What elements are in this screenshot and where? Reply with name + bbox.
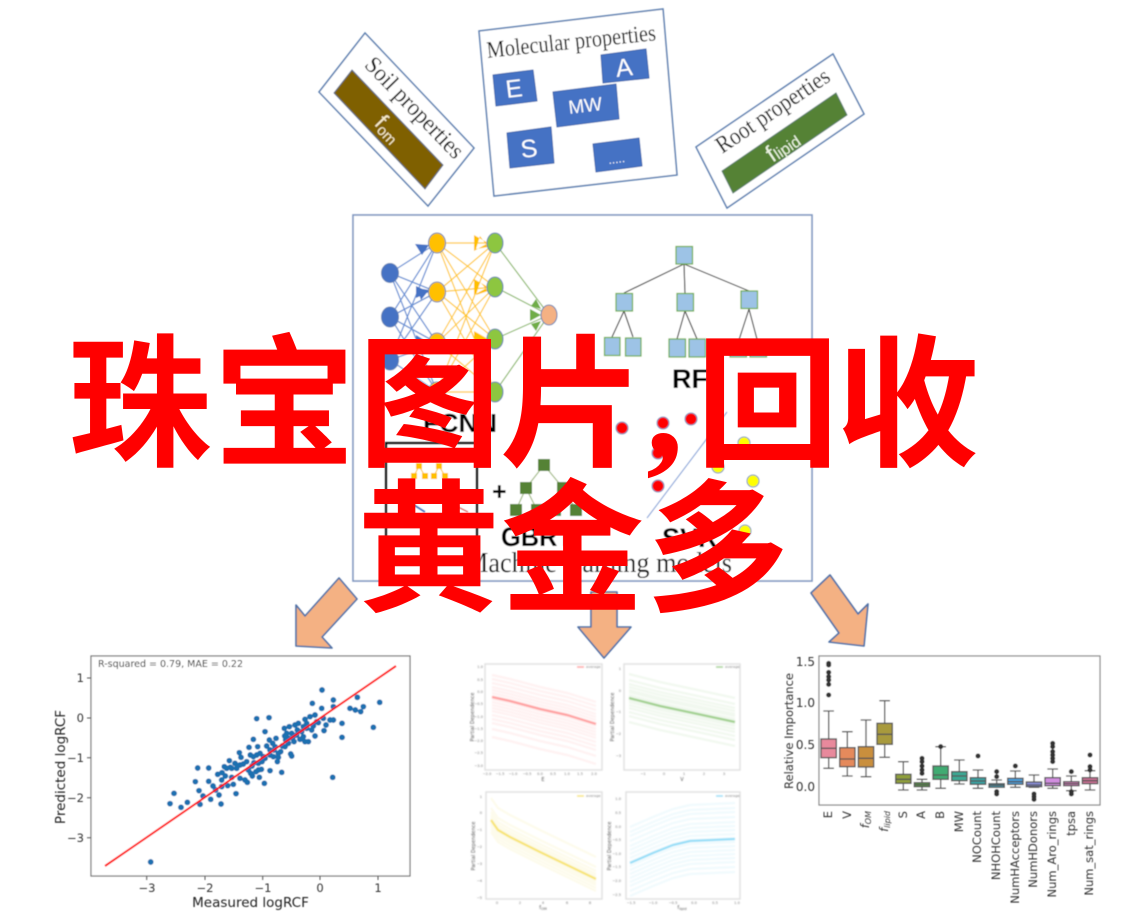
x category labels: f: [858, 824, 872, 828]
y tick labels: 0.5: [796, 738, 815, 752]
feature more: [593, 138, 642, 172]
soil fom label: f: [370, 110, 393, 132]
partial dependence: E: −3.0: [474, 764, 484, 768]
y tick labels: 0.0: [796, 780, 815, 794]
x axis title: Measured logRCF: [192, 895, 309, 911]
partial dependence: flipid: 0.5: [615, 811, 621, 815]
x category labels: NOCount: [970, 811, 984, 863]
partial dependence: E: 0.5: [550, 772, 556, 776]
root flipid label: f: [761, 142, 781, 168]
partial dependence: flipid: −1.5: [612, 865, 621, 869]
gradient boosted tree: [510, 459, 582, 516]
partial dependence: E: 2.0: [591, 772, 598, 776]
arrow: middle: [578, 592, 631, 658]
partial dependence: E: −0.5: [523, 772, 531, 776]
scatter tick labels: −1: [255, 881, 271, 895]
title overlay line 2: 黄金多: [357, 435, 789, 642]
partial dependence: E: average: [586, 665, 602, 669]
partial dependence: E: −1.0: [509, 772, 518, 776]
x category labels: Num_sat_rings: [1082, 811, 1096, 896]
partial dependence: V: V: [680, 777, 684, 783]
partial dependence: fom: 2: [519, 901, 521, 905]
partial dependence: V: Partial Dependence: [610, 693, 616, 741]
partial dependence: flipid: 0.0: [691, 901, 698, 905]
partial dependence: V: 3: [723, 772, 725, 776]
partial dependence: E: 1.5: [577, 772, 583, 776]
x category labels: tpsa: [1064, 811, 1078, 836]
partial dependence: E: −0.5: [474, 702, 483, 706]
x category labels: V: [840, 811, 854, 819]
partial dependence: fom: 1: [480, 795, 482, 799]
partial dependence: E: −2.0: [474, 739, 484, 743]
partial dependence: flipid: 1.0: [734, 901, 741, 905]
feature A: [601, 49, 649, 83]
partial dependence: V: −3: [616, 754, 621, 758]
panel: root properties: [696, 54, 864, 208]
x category labels: B: [933, 811, 947, 819]
feature A: A: [614, 53, 634, 83]
partial dependence: fom: Partial Dependence: [471, 822, 477, 870]
partial dependence: fom: 0: [480, 811, 483, 815]
partial dependence: fom: 8: [589, 901, 592, 905]
boxes, whiskers and outliers: [821, 663, 1098, 799]
x category labels: S: [896, 811, 910, 818]
partial dependence: fom: −2: [477, 845, 482, 849]
scatter chart: predicted vs measured logRCF: [53, 656, 410, 911]
panel: soil properties: [319, 33, 474, 206]
x category labels: NHOHCount: [989, 811, 1003, 880]
plus sign: +: [492, 478, 507, 506]
partial dependence: flipid: −2.5: [612, 893, 621, 897]
title overlay comma: ,: [646, 322, 684, 488]
partial dependence: flipid: 1.0: [615, 797, 622, 801]
partial dependence: fom: −4: [477, 879, 483, 883]
SVM scatter diagram: [616, 412, 759, 537]
partial dependence: flipid: f: [677, 905, 679, 911]
partial dependence: flipid: 0.0: [615, 825, 622, 829]
panel: molecular properties: [479, 9, 677, 196]
soil properties heading: Soil properties: [359, 52, 469, 164]
x category labels: NumHAcceptors: [1008, 811, 1022, 904]
partial dependence: flipid: Partial Dependence: [607, 822, 613, 870]
partial dependence: V: 1: [619, 667, 621, 671]
partial dependence: flipid: −1.0: [612, 852, 622, 856]
machine learning models caption: Machine learning models: [465, 548, 732, 579]
scatter tick labels: 1: [374, 881, 382, 895]
partial dependence: flipid: −2.0: [612, 879, 622, 883]
x category labels: f: [877, 828, 891, 832]
scatter tick labels: −3: [139, 881, 155, 895]
feature E: [493, 70, 537, 106]
scatter tick labels: −2: [67, 791, 84, 805]
partial dependence: flipid: −1.0: [649, 901, 658, 905]
partial dependence: V: 0: [619, 689, 622, 693]
x category labels: OM: [864, 811, 873, 824]
feature S: S: [519, 134, 539, 164]
R-squared annotation: R-squared = 0.79, MAE = 0.22: [98, 659, 243, 670]
title overlay line 1: 珠宝图片回收: [68, 290, 979, 497]
scatter tick labels: −3: [67, 831, 84, 845]
partial dependence: E: 0.0: [537, 772, 544, 776]
partial dependence: flipid: −1.5: [627, 901, 635, 905]
scatter tick labels: −1: [67, 751, 84, 765]
SVR label: SVR: [662, 523, 718, 553]
partial dependence: fom: −5: [477, 896, 482, 900]
partial dependence: V: −1: [640, 772, 646, 776]
root flipid label: lipid: [771, 133, 804, 163]
x category labels: NumHDonors: [1026, 811, 1040, 888]
identity line: [105, 666, 396, 866]
molecular properties heading: Molecular properties: [485, 20, 657, 64]
partial dependence: fom: average: [586, 794, 602, 798]
x category labels: [821, 810, 1096, 904]
soil fom label: om: [373, 122, 400, 149]
scatter points: [151, 690, 380, 862]
feature more: .....: [607, 151, 626, 167]
partial dependence: fom: −1: [477, 828, 482, 832]
partial dependence: E: 0.5: [477, 678, 483, 682]
partial dependence: E: −2.0: [483, 772, 492, 776]
partial dependence charts: [470, 664, 741, 911]
y tick labels: 1.0: [796, 696, 815, 710]
y axis title: Predicted logRCF: [53, 710, 69, 824]
y axis title: Relative Importance: [782, 673, 796, 789]
random forest trees: [604, 246, 766, 357]
partial dependence: fom: 4: [542, 901, 545, 905]
partial dependence: flipid: −0.5: [669, 901, 677, 905]
scatter tick labels: 0: [316, 881, 324, 895]
partial dependence: E: −1.5: [496, 772, 504, 776]
partial dependence: V: 1: [683, 772, 685, 776]
partial dependence: V: −1: [616, 710, 621, 714]
x category labels: E: [821, 811, 835, 818]
feature MW: [553, 84, 619, 127]
x category labels: lipid: [883, 810, 892, 828]
partial dependence: flipid: [607, 792, 741, 911]
partial dependence: fom: −3: [477, 862, 482, 866]
arrow: right: [811, 575, 868, 646]
box plot: relative importance: [782, 655, 1100, 904]
RF label: RF: [672, 364, 708, 394]
feature E: E: [504, 74, 524, 104]
partial dependence: V: 0: [663, 772, 666, 776]
y tick labels: 1.5: [796, 655, 815, 669]
partial dependence: flipid: −0.5: [612, 838, 621, 842]
scatter tick labels: 1: [77, 671, 84, 685]
stacked model frame: [386, 443, 477, 581]
partial dependence: flipid: 0.5: [712, 901, 718, 905]
partial dependence: fom: f: [539, 905, 541, 911]
feature S: [507, 127, 554, 168]
partial dependence: V: −2: [616, 732, 621, 736]
x category labels: A: [914, 811, 928, 819]
partial dependence: flipid: average: [725, 794, 741, 798]
partial dependence: E: −1.5: [474, 727, 483, 731]
x category labels: MW: [952, 811, 966, 832]
root properties heading: Root properties: [711, 64, 835, 159]
partial dependence: fom: 6: [566, 901, 569, 905]
partial dependence: E: Partial Dependence: [470, 693, 476, 741]
partial dependence: E: [470, 664, 602, 783]
partial dependence: fom: 0: [496, 901, 499, 905]
FCNN label: FCNN: [423, 408, 497, 438]
partial dependence: fom: [471, 792, 602, 911]
partial dependence: V: 2: [703, 772, 705, 776]
partial dependence: V: [610, 664, 741, 783]
partial dependence: E: E: [541, 777, 545, 783]
arrow: left: [296, 578, 357, 648]
feature MW: MW: [567, 94, 603, 119]
neural network diagram: [382, 233, 557, 402]
panel: machine learning models: [353, 215, 812, 581]
partial dependence: fom: OM: [541, 907, 547, 911]
partial dependence: E: 0.0: [477, 690, 484, 694]
x category labels: Num_Aro_rings: [1045, 811, 1059, 897]
scatter tick labels: 0: [77, 711, 84, 725]
y tick labels: [796, 655, 815, 794]
partial dependence: E: −2.5: [474, 751, 483, 755]
partial dependence: E: 1.0: [564, 772, 571, 776]
partial dependence: V: average: [725, 665, 741, 669]
scatter tick labels: [67, 671, 382, 895]
GBRT label: GBRT: [501, 522, 573, 552]
partial dependence: E: −1.0: [474, 715, 484, 719]
partial dependence: flipid: lipid: [679, 907, 687, 911]
scatter tick labels: −2: [197, 881, 213, 895]
partial dependence: E: 1.0: [477, 665, 484, 669]
